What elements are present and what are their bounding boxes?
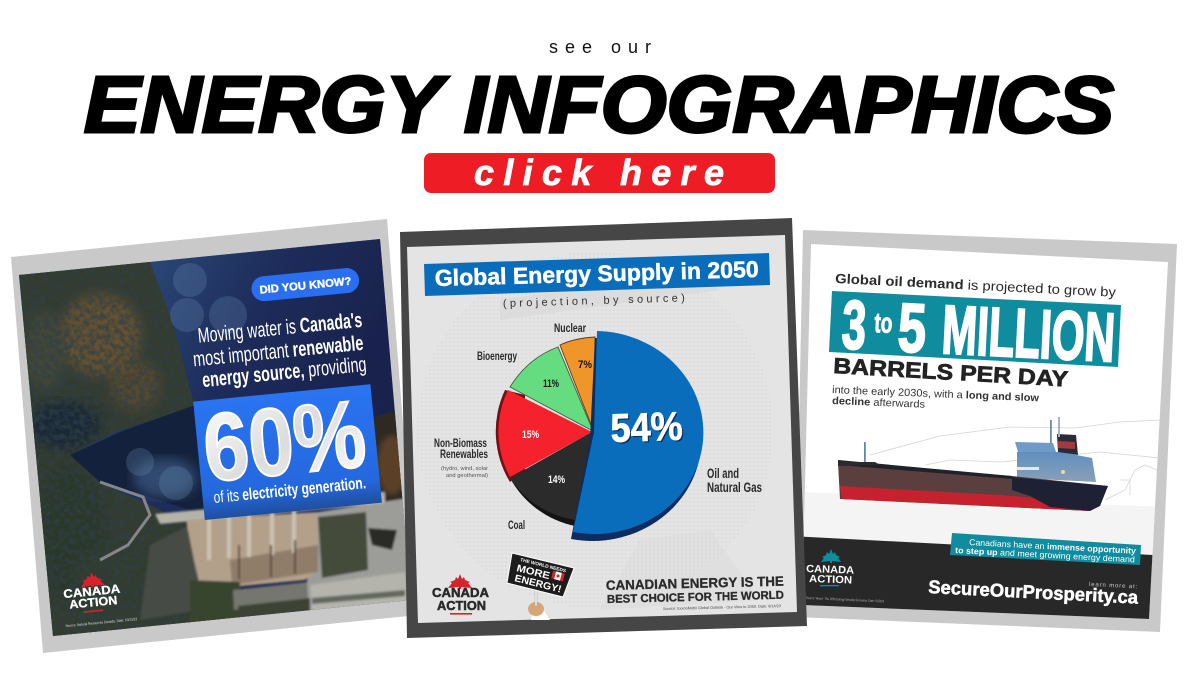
blue stat box: 60% xyxy=(199,380,370,503)
teal banner: 3 to 5 million xyxy=(829,286,1121,376)
protest sign: the world needs more energy: ENERGY! xyxy=(513,573,563,596)
callout: immense opportunity: to step up and meet growing energy demand xyxy=(955,545,1135,564)
callout: immense opportunity: Canadians have an immense opportunity xyxy=(969,537,1136,556)
click here button: click here xyxy=(474,152,724,193)
blue stat box: of its electricity generation. xyxy=(213,474,367,507)
pie values: 15% xyxy=(522,429,539,441)
footer band xyxy=(790,536,1153,620)
slice labels: Renewables xyxy=(440,447,488,461)
pie chart xyxy=(496,331,703,541)
description: into the early 2030s, with a long and slow xyxy=(832,384,1040,404)
closing statement: CANADIAN ENERGY IS THE xyxy=(606,574,784,593)
pie values: 11% xyxy=(543,378,559,390)
ship xyxy=(838,417,1108,511)
slice labels: (hydro, wind, solar xyxy=(441,466,488,472)
intro line: Global oil demand is projected to grow by xyxy=(835,271,1117,300)
logo: Canada Action xyxy=(62,570,122,615)
panel: right, oil demand infographic xyxy=(790,230,1190,632)
panel: hydro electricity infographic xyxy=(0,219,420,653)
pie values: 14% xyxy=(548,474,565,486)
slice labels: Nuclear xyxy=(554,321,586,335)
panel text and callouts xyxy=(33,267,391,628)
logo: Canada Action: ACTION xyxy=(809,573,852,586)
slice labels: Bioenergy xyxy=(477,349,517,363)
icon: Canadian flag xyxy=(551,571,565,581)
protest sign: the world needs more energy: THE WORLD NEEDS xyxy=(520,557,567,573)
headline: energy source, providing xyxy=(201,353,368,392)
headline: most important renewable xyxy=(192,332,364,371)
slice: coal 14% xyxy=(510,432,592,520)
closing statement: BEST CHOICE FOR THE WORLD xyxy=(607,590,784,606)
panel content xyxy=(804,244,1168,619)
logo: Canada Action: CANADA xyxy=(63,582,121,601)
callout: immense opportunity xyxy=(950,533,1141,565)
website call to action: learn more at: xyxy=(1089,582,1138,590)
teal banner: 3 to 5 million: 3 xyxy=(840,286,868,364)
source note: Source: Wood - The 2050 Energy Security Scenarios. Date: 5/23/23 xyxy=(806,596,884,603)
panel frame xyxy=(400,218,807,638)
logo: Canada Action xyxy=(432,574,489,615)
title bar: Global Energy Supply in 2050 xyxy=(434,256,759,291)
slice: non-biomass renewables 15% xyxy=(498,390,592,477)
aerial photo of dam and forest xyxy=(19,239,406,636)
headline xyxy=(190,309,368,393)
sketch of hills and city xyxy=(870,420,1160,500)
slice labels: Oil and xyxy=(707,466,739,481)
source note: Source: Natural Resources Canada. Date: 10/23/23 xyxy=(65,617,137,628)
logo: Canada Action: CANADA xyxy=(806,563,855,577)
panel: center, global energy supply xyxy=(400,218,810,638)
slice shadows xyxy=(510,432,592,526)
protest sign: the world needs more energy: MORE xyxy=(515,563,551,582)
pie values xyxy=(522,359,685,486)
subtitle: (projection, by source) xyxy=(503,292,685,310)
panel frame xyxy=(795,230,1177,632)
website call to action: SecureOurProsperity.ca xyxy=(928,576,1139,608)
logo: Canada Action: ACTION xyxy=(69,593,118,612)
logo: Canada Action: ACTION xyxy=(437,599,486,613)
teal banner: 3 to 5 million: to xyxy=(874,307,893,339)
barrels per day: BARRELS PER DAY xyxy=(833,353,1069,392)
header kicker: see our xyxy=(549,37,651,57)
slice: oil and natural gas 54% xyxy=(571,331,703,541)
teal banner: 3 to 5 million: 5 xyxy=(896,289,928,367)
slice labels: and geothermal) xyxy=(446,473,488,479)
did you know pill: DID YOU KNOW? xyxy=(259,276,352,297)
slice: bioenergy 11% xyxy=(510,347,593,431)
slice labels: Natural Gas xyxy=(707,480,762,495)
protest sign: the world needs more energy xyxy=(507,553,574,620)
slice labels xyxy=(434,321,762,532)
slice: nuclear 7% xyxy=(560,337,595,432)
pie values: 7% xyxy=(578,359,592,371)
source note: Source: ExxonMobil Global Outlook - Our View to 2050. Date: 9/14/23 xyxy=(663,604,781,611)
description: decline afterwards xyxy=(832,395,925,411)
textured background xyxy=(400,230,810,630)
slice labels: Coal xyxy=(508,518,525,532)
pie values: 54% xyxy=(610,405,683,451)
panel frame xyxy=(11,219,418,653)
logo: Canada Action: CANADA xyxy=(432,586,489,600)
main title: ENERGY INFOGRAPHICS xyxy=(84,60,1114,149)
did you know pill xyxy=(250,267,360,302)
logo: Canada Action xyxy=(806,549,855,586)
closing statement xyxy=(606,574,784,606)
pie values: 54% xyxy=(611,406,685,452)
slice labels: Non-Biomass xyxy=(434,436,487,450)
headline: Moving water is Canada's xyxy=(197,309,363,348)
